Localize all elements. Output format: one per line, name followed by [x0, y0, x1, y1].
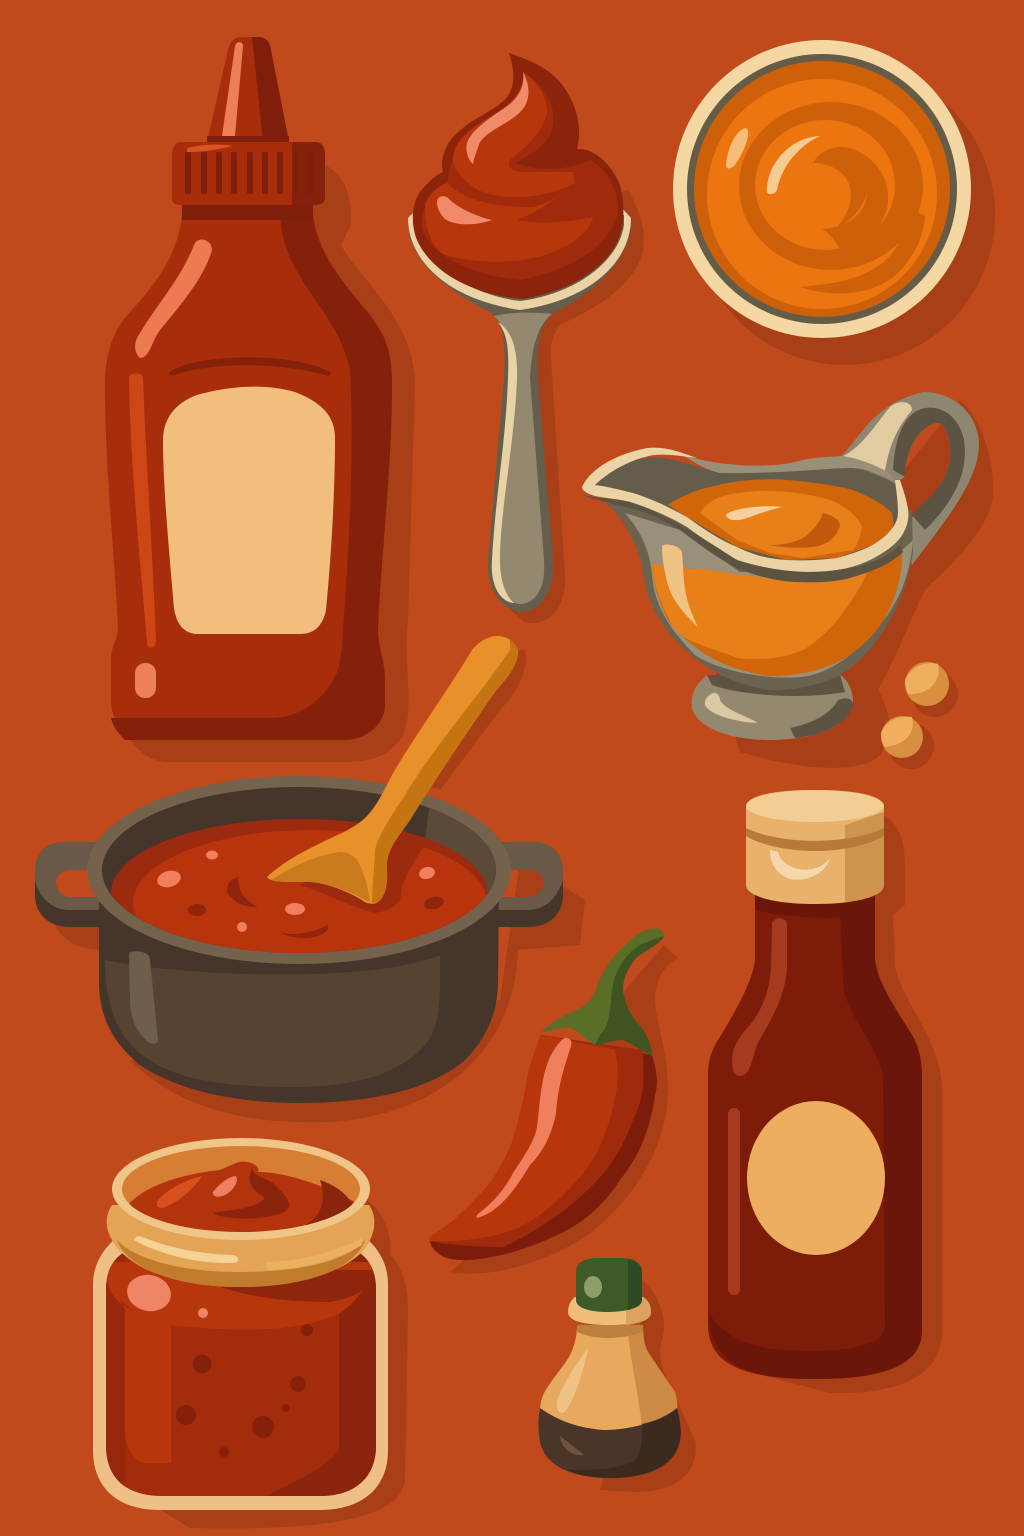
chili stem	[541, 928, 664, 1056]
icon: red chili pepper	[430, 928, 678, 1274]
icon: squeeze bottle	[105, 37, 415, 762]
icon: tall sauce bottle	[708, 790, 942, 1393]
gravy boat interior	[595, 457, 905, 565]
wooden spoon	[267, 636, 518, 904]
bottle label	[163, 387, 335, 634]
icon: gravy boat	[582, 392, 993, 768]
icon: cooking pot with sauce and spoon	[35, 636, 585, 1122]
gravy boat lip	[582, 448, 908, 573]
icon: spoon with sauce	[408, 53, 644, 623]
icon: two spice seeds	[881, 662, 958, 769]
gravy boat back rim	[680, 454, 896, 482]
icon: sauce bowl	[673, 40, 995, 365]
icon: bottle nozzle and cap	[172, 37, 325, 220]
gravy boat base	[692, 675, 853, 740]
jar sauce body	[106, 1253, 376, 1496]
icon: sauce dollop	[413, 53, 623, 299]
icon: jar of sauce	[93, 1138, 408, 1528]
gravy boat handle	[839, 392, 979, 565]
pot sauce	[111, 808, 496, 953]
icon: small soy bottle	[538, 1258, 696, 1492]
bottle cap	[746, 790, 884, 904]
sauce specks	[176, 1324, 313, 1457]
pot handles	[35, 842, 563, 927]
jar collar and rim	[107, 1138, 374, 1287]
sauce chunks	[155, 850, 445, 938]
